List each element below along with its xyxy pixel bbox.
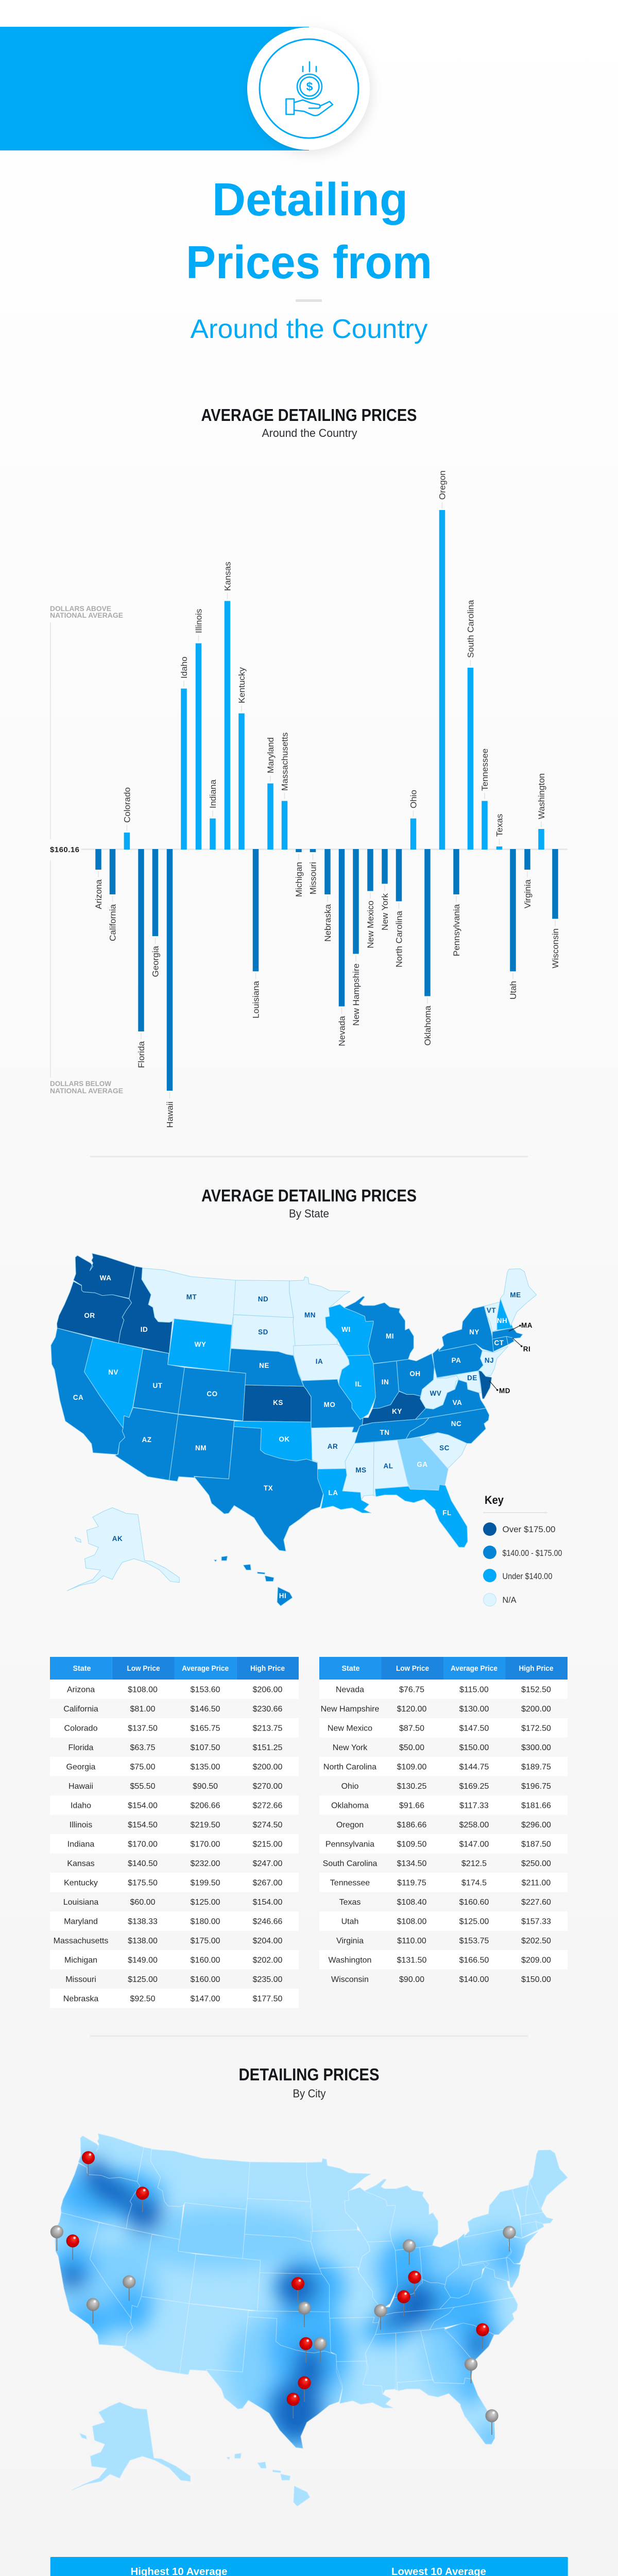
state labels: IA xyxy=(316,1358,323,1365)
bar: Texas: Texas xyxy=(494,814,505,837)
state borders xyxy=(55,2133,568,2506)
table: state prices, right: $109.00 xyxy=(397,1763,427,1771)
table: state prices, right: $110.00 xyxy=(397,1937,426,1945)
table: state prices, right: $131.50 xyxy=(397,1956,427,1965)
bar: Nevada: Nevada xyxy=(337,1015,347,1046)
table: state prices, left: $230.66 xyxy=(253,1705,283,1714)
bar: Ohio xyxy=(409,790,418,850)
state labels: MI xyxy=(386,1332,394,1340)
state labels: KS xyxy=(273,1399,283,1406)
table: state prices, left: $206.00 xyxy=(253,1686,283,1694)
bar: Kansas: Kansas xyxy=(222,562,233,591)
bar: Oklahoma: Oklahoma xyxy=(423,1005,433,1045)
table: state prices, left: California xyxy=(63,1705,98,1714)
table: state prices, right: $108.00 xyxy=(397,1918,427,1926)
state labels: CO xyxy=(207,1390,218,1398)
table: state prices, right: Utah xyxy=(341,1918,358,1926)
state labels: IN xyxy=(382,1378,389,1386)
table: state prices, left: $235.00 xyxy=(253,1975,283,1984)
bar: Colorado: Colorado xyxy=(122,787,132,823)
legend: key: Over $175.00 xyxy=(503,1524,555,1534)
state labels: PA xyxy=(452,1357,461,1364)
table: state prices, left: $232.00 xyxy=(191,1859,220,1868)
table: state prices, left: $204.00 xyxy=(253,1937,283,1945)
state labels: SD xyxy=(258,1328,268,1336)
table: state prices, left: Idaho xyxy=(71,1801,91,1810)
table: state prices, left: Arizona xyxy=(67,1686,95,1694)
bar: Tennessee: Tennessee xyxy=(480,749,490,791)
state labels: NY xyxy=(469,1328,479,1336)
callout lines: MA, RI, MD xyxy=(489,1325,522,1391)
table: state prices, right: New York xyxy=(333,1743,368,1752)
table: state prices, left: $60.00 xyxy=(130,1898,156,1907)
bar: Louisiana: Louisiana xyxy=(251,980,261,1019)
table: state prices, right: $87.50 xyxy=(399,1724,424,1733)
table: state prices, right: $115.00 xyxy=(459,1686,489,1694)
bar: Michigan: Michigan xyxy=(294,862,304,897)
state labels: GA xyxy=(417,1461,428,1468)
table: state prices, right: $202.50 xyxy=(521,1937,551,1945)
table: state prices, right: $147.00 xyxy=(459,1840,489,1849)
bar: Texas xyxy=(494,814,505,850)
table: state prices, right: Wisconsin xyxy=(331,1975,369,1984)
state labels: LA xyxy=(329,1489,338,1497)
table: state prices, left: Massachusetts xyxy=(54,1937,108,1945)
table: state prices, right: $108.40 xyxy=(397,1898,427,1907)
state labels: ID xyxy=(141,1326,148,1333)
legend: key xyxy=(483,1494,562,1606)
table: state prices, right: $174.5 xyxy=(461,1878,487,1888)
state labels: OK xyxy=(279,1435,290,1443)
bar: Virginia: Virginia xyxy=(523,879,533,908)
table: state prices, right: Virginia xyxy=(336,1937,364,1945)
table: state prices, left: $175.50 xyxy=(128,1878,158,1888)
table: state prices, left: $180.00 xyxy=(191,1918,220,1926)
state labels: HI xyxy=(279,1592,286,1600)
table: state prices, right: $76.75 xyxy=(399,1686,424,1694)
table: state prices, left: $63.75 xyxy=(130,1743,156,1752)
table: state prices, left: $274.50 xyxy=(253,1821,283,1829)
table: state prices, left: $108.00 xyxy=(128,1686,158,1694)
table: state prices, right: $90.00 xyxy=(399,1975,424,1984)
bar: Pennsylvania: Pennsylvania xyxy=(452,904,461,956)
table: state prices, right: Ohio xyxy=(341,1782,358,1791)
table: state prices, right: $120.00 xyxy=(397,1705,427,1714)
table: state prices, left: $138.00 xyxy=(128,1937,158,1945)
title: Prices from xyxy=(186,237,432,289)
state labels: MN xyxy=(304,1311,316,1319)
axis: DOLLARS ABOVE xyxy=(50,605,111,613)
bar: Nebraska: Nebraska xyxy=(323,904,333,942)
table: state prices, left: Louisiana xyxy=(63,1898,98,1907)
table: state prices, right: $187.50 xyxy=(521,1840,551,1849)
table: state prices, right: $130.00 xyxy=(459,1705,489,1714)
bar chart: average detailing prices by state vs national average xyxy=(50,470,568,1128)
table: state prices, left: $160.00 xyxy=(191,1975,220,1984)
table: state prices, right: $166.50 xyxy=(459,1956,489,1965)
table: state prices, right: State xyxy=(342,1664,359,1673)
heading: average prices by state: By State xyxy=(289,1207,329,1220)
table: state prices, left: $247.00 xyxy=(253,1859,283,1868)
table: state prices, left: $272.66 xyxy=(253,1801,283,1810)
bar: Arizona: Arizona xyxy=(94,879,104,909)
state labels: TN xyxy=(380,1429,389,1436)
table: state prices, right: $140.00 xyxy=(459,1975,489,1984)
table: state prices, left: $81.00 xyxy=(130,1705,156,1714)
table: state prices, left: $154.50 xyxy=(128,1821,158,1829)
table: state prices, left: Nebraska xyxy=(63,1995,98,2003)
state labels: AR xyxy=(328,1443,338,1450)
table: state prices, right: $186.66 xyxy=(397,1821,427,1829)
table: state prices, right: $109.50 xyxy=(397,1840,427,1849)
bar: Washington: Washington xyxy=(537,773,546,819)
state labels: WV xyxy=(430,1389,441,1397)
state labels: WA xyxy=(100,1274,111,1282)
state labels: NH xyxy=(497,1317,507,1325)
table: state prices, right: $134.50 xyxy=(397,1859,427,1868)
table: state prices, left: $219.50 xyxy=(191,1821,220,1829)
table: state prices, right: South Carolina xyxy=(323,1859,377,1868)
state labels: NE xyxy=(259,1362,269,1369)
bar: New Hampshire: New Hampshire xyxy=(351,963,361,1026)
table: state prices, left: $140.50 xyxy=(128,1859,158,1868)
table: state prices, right: $152.50 xyxy=(521,1686,551,1694)
table: state prices, left: Maryland xyxy=(64,1918,98,1926)
table: state prices, left: $137.50 xyxy=(128,1724,158,1733)
heat layer xyxy=(55,2133,568,2506)
heading: prices by city: DETAILING PRICES xyxy=(239,2065,379,2084)
state labels: SC xyxy=(439,1444,450,1452)
heading: average prices around the country: AVERAGE DETAILING PRICES xyxy=(201,405,417,425)
bar: Massachusetts: Massachusetts xyxy=(280,733,289,791)
table: state prices, right: $258.00 xyxy=(459,1821,489,1829)
state labels: AK xyxy=(112,1535,123,1543)
table: state prices, right: $91.66 xyxy=(399,1801,424,1810)
table: state prices, left: $175.00 xyxy=(191,1937,220,1945)
state labels: NV xyxy=(108,1368,118,1376)
table: state prices, left: Florida xyxy=(68,1743,94,1752)
state labels: NM xyxy=(195,1444,207,1452)
bar: Missouri: Missouri xyxy=(308,862,318,894)
table: state prices, left: $154.00 xyxy=(253,1898,283,1907)
panel: highest and lowest ten averages xyxy=(50,2557,568,2576)
table: state prices, left: $138.33 xyxy=(128,1918,158,1926)
bar: Florida: Florida xyxy=(136,1041,146,1068)
table: state prices, right: $119.75 xyxy=(397,1878,426,1888)
state labels: NC xyxy=(451,1420,461,1428)
table: state prices, right: $211.00 xyxy=(522,1878,551,1888)
state labels: NJ xyxy=(485,1357,494,1364)
heading: average prices around the country: Around the Country xyxy=(262,427,357,439)
table: state prices, left: $267.00 xyxy=(253,1878,283,1888)
bar: Maryland: Maryland xyxy=(266,737,276,773)
state labels: OH xyxy=(409,1370,421,1378)
state labels: AZ xyxy=(142,1436,151,1444)
state labels xyxy=(73,1274,533,1600)
bar: Indiana xyxy=(208,779,218,850)
heading: prices by city: By City xyxy=(293,2087,325,2100)
axis: NATIONAL AVERAGE xyxy=(50,1087,123,1095)
table: state prices, left: $206.66 xyxy=(191,1801,220,1810)
table: state prices, left: $199.50 xyxy=(191,1878,220,1888)
table: state prices, left: High Price xyxy=(250,1664,285,1673)
axis: $160.16 xyxy=(50,845,79,854)
pins: highest ten cities xyxy=(66,2151,489,2418)
table: state prices, left: Kansas xyxy=(67,1859,95,1868)
title xyxy=(186,174,432,344)
table: state prices, left: $160.00 xyxy=(191,1956,220,1965)
legend: key: Key xyxy=(485,1494,504,1506)
bar: Kentucky: Kentucky xyxy=(237,667,247,703)
table: state prices, left: $215.00 xyxy=(253,1840,283,1849)
heading: prices by city xyxy=(239,2065,379,2100)
table: state prices, left: $146.50 xyxy=(191,1705,220,1714)
state labels: RI xyxy=(523,1345,530,1353)
bar: Virginia xyxy=(523,849,533,908)
table: state prices, left: $92.50 xyxy=(130,1995,156,2003)
table: state prices, left: $149.00 xyxy=(128,1956,158,1965)
table: state prices, right: $196.75 xyxy=(521,1782,551,1791)
table: state prices, left: $177.50 xyxy=(253,1995,283,2003)
table: state prices, right xyxy=(319,1657,568,1984)
table: state prices, right: New Mexico xyxy=(328,1724,372,1733)
state labels: OR xyxy=(84,1312,95,1319)
table: state prices, right: Washington xyxy=(329,1956,371,1965)
table: state prices, right: $296.00 xyxy=(521,1821,551,1829)
table: state prices, left: Missouri xyxy=(65,1975,96,1984)
table: state prices, left: $246.66 xyxy=(253,1918,283,1926)
table: state prices, right: Oklahoma xyxy=(331,1801,369,1810)
table: state prices, right: $200.00 xyxy=(521,1705,551,1714)
table: state prices, right: $117.33 xyxy=(459,1801,489,1810)
table: state prices, right: $169.25 xyxy=(459,1782,489,1791)
state labels: ND xyxy=(258,1295,268,1303)
bar: Arizona xyxy=(94,849,104,909)
bar: Colorado xyxy=(122,787,132,850)
header banner with icon xyxy=(0,27,370,150)
table: state prices, right: $227.60 xyxy=(521,1898,551,1907)
bar: Utah: Utah xyxy=(508,981,518,999)
table: state prices, left: Kentucky xyxy=(64,1878,98,1888)
bar: Indiana: Indiana xyxy=(208,779,218,808)
heading: average prices by state: AVERAGE DETAILING PRICES xyxy=(201,1186,417,1205)
state labels: MS xyxy=(355,1466,367,1474)
table: state prices, left: $200.00 xyxy=(253,1763,283,1771)
table: state prices, right: New Hampshire xyxy=(321,1705,380,1714)
table: state prices, right: Texas xyxy=(339,1898,360,1907)
bar: California: California xyxy=(108,904,117,941)
bar: New York: New York xyxy=(380,893,390,930)
state labels: WY xyxy=(195,1341,206,1348)
table: state prices, left: $270.00 xyxy=(253,1782,283,1791)
state labels: TX xyxy=(264,1484,273,1492)
axis: NATIONAL AVERAGE xyxy=(50,612,123,619)
bar: Oregon: Oregon xyxy=(438,470,447,500)
table: state prices, left: Illinois xyxy=(70,1821,92,1829)
table: state prices, left: Michigan xyxy=(64,1956,97,1965)
table: state prices, right: $147.50 xyxy=(459,1724,489,1733)
table: state prices, right: $150.00 xyxy=(459,1743,489,1752)
bar: North Carolina: North Carolina xyxy=(394,910,404,968)
table: state prices, right: Tennessee xyxy=(330,1878,370,1888)
table: state prices, right: $150.00 xyxy=(521,1975,551,1984)
table: state prices, right: $144.75 xyxy=(459,1763,489,1771)
bar: Georgia: Georgia xyxy=(150,945,161,977)
table: state prices, left: Low Price xyxy=(127,1664,160,1673)
table: state prices, left: $55.50 xyxy=(130,1782,156,1791)
state labels: ME xyxy=(510,1291,521,1299)
table: state prices, right: $212.5 xyxy=(461,1859,487,1868)
table: state prices, left: $107.50 xyxy=(191,1743,220,1752)
table: state prices, right: Low Price xyxy=(396,1664,429,1673)
table: state prices, right: $50.00 xyxy=(399,1743,424,1752)
state labels: VT xyxy=(487,1307,496,1314)
state labels: VA xyxy=(453,1399,462,1406)
icon: coin in hand xyxy=(286,62,333,115)
legend: key: Under $140.00 xyxy=(503,1571,552,1581)
table: state prices, right: North Carolina xyxy=(323,1763,376,1771)
table: state prices, left: $202.00 xyxy=(253,1956,283,1965)
icon: coin in hand: $ xyxy=(306,80,313,93)
state labels: UT xyxy=(152,1382,163,1389)
table: state prices, left: $170.00 xyxy=(128,1840,158,1849)
bar: Hawaii: Hawaii xyxy=(165,1101,175,1128)
table: state prices, right: $181.66 xyxy=(521,1801,551,1810)
state labels: WI xyxy=(341,1326,351,1333)
table: state prices, right: Nevada xyxy=(336,1686,364,1694)
bar: South Carolina: South Carolina xyxy=(466,600,476,658)
state labels: DE xyxy=(467,1374,477,1382)
table: state prices, right: $157.33 xyxy=(521,1918,551,1926)
table: state prices, right: $300.00 xyxy=(521,1743,551,1752)
table: state prices, left: $90.50 xyxy=(193,1782,218,1791)
state labels: MD xyxy=(499,1387,510,1395)
state labels: MO xyxy=(324,1401,335,1409)
table: state prices, left: Average Price xyxy=(182,1664,229,1673)
table: state prices, left: $170.00 xyxy=(191,1840,220,1849)
table: state prices, left: $135.00 xyxy=(191,1763,220,1771)
table: state prices, left: Colorado xyxy=(64,1724,98,1733)
table: state prices, left: Hawaii xyxy=(68,1782,93,1791)
heading: average prices around the country xyxy=(201,405,417,439)
table: state prices, right: High Price xyxy=(519,1664,553,1673)
bar: Ohio: Ohio xyxy=(409,790,418,808)
map: average price by state xyxy=(51,1253,537,1606)
table: state prices, left xyxy=(50,1657,299,2008)
bar: Wisconsin: Wisconsin xyxy=(551,928,560,968)
table: state prices, left: $125.00 xyxy=(128,1975,158,1984)
table: state prices, right: $250.00 xyxy=(521,1859,551,1868)
legend: key: $140.00 - $175.00 xyxy=(503,1548,562,1558)
title: Around the Country xyxy=(191,314,427,344)
table: state prices, left: State xyxy=(73,1664,91,1673)
table: state prices, left: Georgia xyxy=(66,1763,96,1771)
bar: Illinois: Illinois xyxy=(194,609,204,633)
table: state prices, right: $160.60 xyxy=(459,1898,489,1907)
axis: DOLLARS BELOW xyxy=(50,1080,111,1088)
table: state prices, left: $154.00 xyxy=(128,1801,158,1810)
map: heat map of prices by city xyxy=(50,2133,568,2506)
state labels: MA xyxy=(521,1321,533,1329)
legend: key: N/A xyxy=(503,1595,517,1605)
table: state prices, left: $147.00 xyxy=(191,1995,220,2003)
pins: lowest ten cities xyxy=(50,2225,516,2435)
table: state prices, left: $153.60 xyxy=(191,1686,220,1694)
table: state prices, right: $125.00 xyxy=(459,1918,489,1926)
state labels: FL xyxy=(442,1509,452,1517)
table: state prices, right: $153.75 xyxy=(459,1937,489,1945)
table: state prices, right: Pennsylvania xyxy=(325,1840,374,1849)
table: state prices, left: $213.75 xyxy=(253,1724,283,1733)
table: state prices, left: $151.25 xyxy=(253,1743,283,1752)
bar: New Mexico: New Mexico xyxy=(366,901,375,948)
table: state prices, right: $130.25 xyxy=(397,1782,427,1791)
state labels: AL xyxy=(383,1462,393,1470)
title: Detailing xyxy=(212,174,408,226)
heading: average prices by state xyxy=(201,1186,417,1220)
table: state prices, left: $165.75 xyxy=(191,1724,220,1733)
bar: Idaho: Idaho xyxy=(179,656,189,679)
table: state prices, right: $172.50 xyxy=(521,1724,551,1733)
state labels: IL xyxy=(355,1380,362,1388)
state labels: CA xyxy=(73,1394,83,1401)
table: state prices, right: $189.75 xyxy=(521,1763,551,1771)
table: state prices, left: $125.00 xyxy=(191,1898,220,1907)
state labels: KY xyxy=(392,1408,402,1415)
state labels: CT xyxy=(494,1339,504,1347)
axis xyxy=(50,605,568,1095)
table: state prices, right: Average Price xyxy=(451,1664,497,1673)
table: state prices, left: Indiana xyxy=(67,1840,94,1849)
table: state prices, right: Oregon xyxy=(336,1821,364,1829)
state labels: MT xyxy=(186,1293,197,1301)
table: state prices, right: $209.00 xyxy=(521,1956,551,1965)
table: state prices, left: $75.00 xyxy=(130,1763,156,1771)
